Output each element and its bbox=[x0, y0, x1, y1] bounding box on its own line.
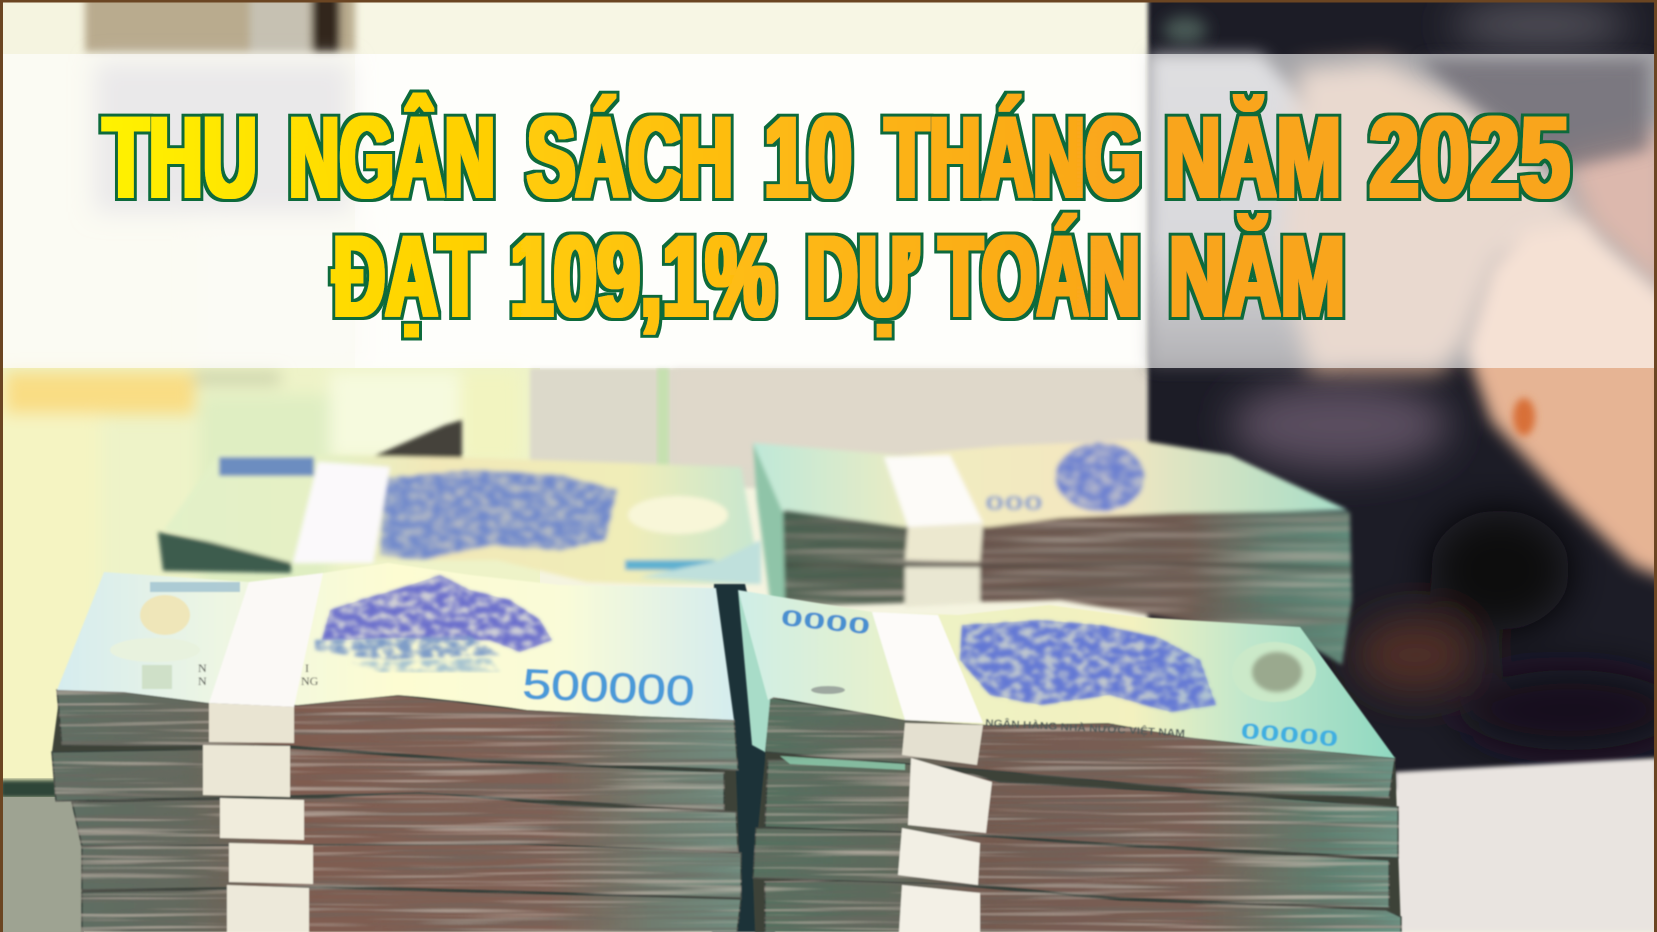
lower left wall bbox=[0, 368, 1155, 932]
band dark top-right tint bbox=[1420, 60, 1648, 170]
note top face bbox=[57, 563, 734, 720]
title line 1: THU bbox=[103, 94, 257, 222]
stack shadow underlay bbox=[753, 697, 1401, 932]
title line 1: 10 bbox=[764, 94, 852, 222]
banknote stack: front left: N bbox=[198, 674, 207, 688]
serial digits, front: 00000 bbox=[1240, 718, 1339, 752]
upper hand bbox=[1280, 61, 1600, 372]
banknote stack: front left: NG bbox=[301, 674, 319, 688]
table surface bbox=[1395, 758, 1657, 932]
mint left edge of notes bbox=[738, 590, 770, 752]
title line 1: THÁNG bbox=[885, 94, 1141, 222]
small banknote lettering: N bbox=[198, 661, 207, 675]
title line 1: SÁCH bbox=[527, 94, 733, 222]
title line 2: 109,1% bbox=[510, 213, 775, 341]
banknote stack: back right bbox=[753, 440, 1352, 665]
gray paper sheet at right of band bbox=[1150, 54, 1340, 368]
seal spot bbox=[1232, 642, 1316, 702]
title line 2: DỰ bbox=[806, 213, 918, 341]
banknote stack: back left bbox=[158, 420, 761, 584]
title bbox=[103, 94, 1570, 341]
thumb in foreground bbox=[1466, 222, 1657, 580]
top strap bbox=[872, 612, 983, 723]
paper straps on side bbox=[898, 723, 992, 932]
top strap bbox=[209, 573, 323, 707]
fingertips right edge bbox=[1560, 125, 1657, 300]
paper straps on side bbox=[203, 703, 313, 932]
upper left wall and shelf bbox=[85, 0, 1146, 370]
banknote stack: front left: I bbox=[305, 661, 309, 675]
title line 1: NĂM bbox=[1165, 94, 1341, 222]
stack sides bbox=[52, 690, 741, 932]
banknote stack: back right: 000 bbox=[985, 493, 1043, 515]
title line 1 bbox=[103, 94, 1570, 222]
dark right side bbox=[1148, 0, 1657, 790]
stack shadow underlay bbox=[52, 692, 741, 932]
title line 2: TOÁN bbox=[939, 213, 1140, 341]
note top face bbox=[738, 590, 1395, 758]
banknote stack: front left bbox=[52, 563, 741, 932]
title line 1: 2025 bbox=[1369, 94, 1570, 222]
title line 2: ĐẠT bbox=[333, 213, 482, 341]
dark gap between front stacks bbox=[712, 584, 778, 932]
banknote stack: front right: NGÂN HÀNG NHÀ NƯỚC VIỆT NAM bbox=[985, 716, 1185, 739]
serial digits, top: 0000 bbox=[779, 604, 872, 639]
title line 2: NĂM bbox=[1169, 213, 1345, 341]
engraved temple motif bbox=[960, 620, 1216, 712]
amount on banknote: 500000 bbox=[522, 660, 695, 714]
engraved landscape motif bbox=[315, 575, 552, 672]
title line 2 bbox=[333, 213, 1345, 341]
banknote stack: front right bbox=[738, 590, 1401, 932]
title line 1: NGÂN bbox=[289, 94, 495, 222]
translucent title band bbox=[3, 54, 1654, 368]
stack sides bbox=[753, 697, 1401, 932]
